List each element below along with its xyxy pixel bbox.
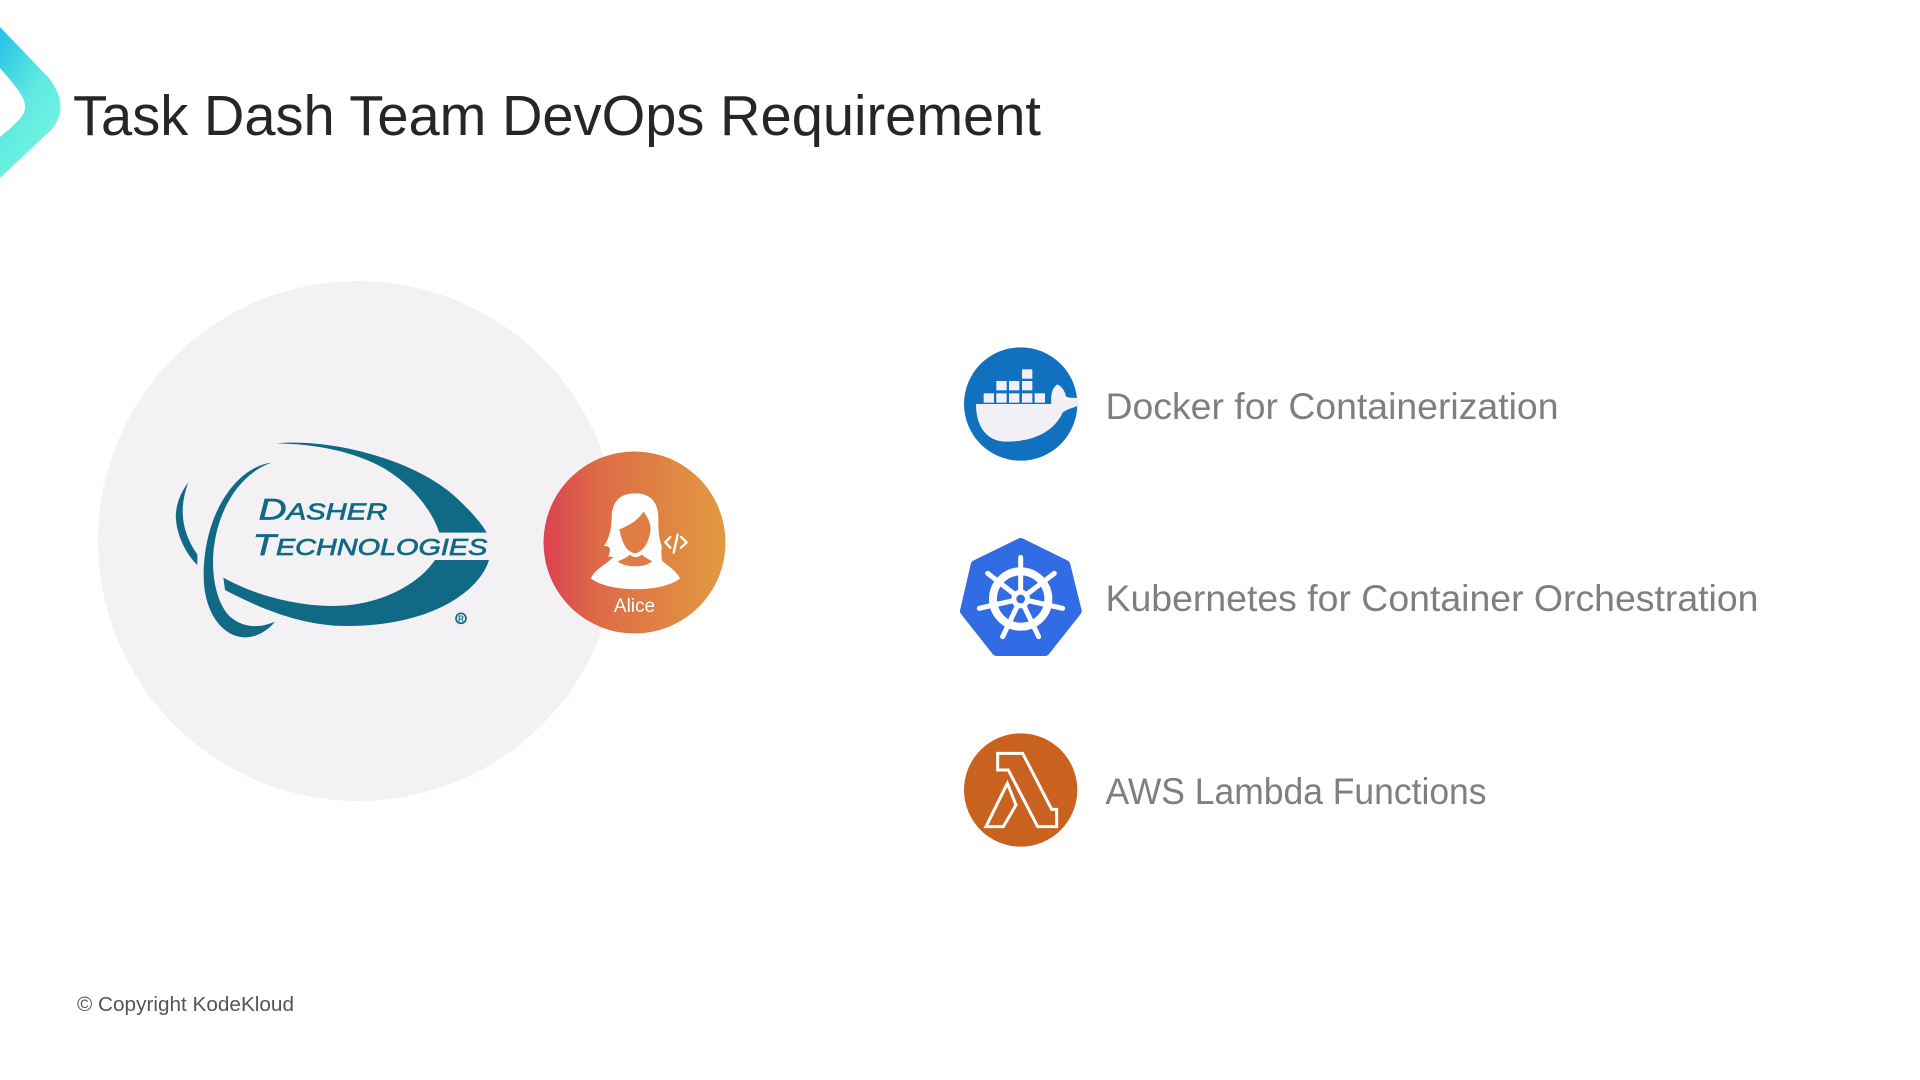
label: AWS Lambda: AWS Lambda Functions bbox=[1106, 771, 1486, 812]
label: Docker: Docker for Containerization bbox=[1106, 386, 1558, 427]
label: Kubernetes: Kubernetes for Container Orchestration bbox=[1106, 578, 1758, 619]
logo: Dasher Technologies bbox=[176, 443, 489, 637]
icon: AWS Lambda bbox=[964, 733, 1077, 847]
icon: Alice badge bbox=[544, 452, 726, 634]
logo: Dasher Technologies: DASHER bbox=[259, 493, 387, 526]
footer copyright: © Copyright KodeKloud bbox=[77, 994, 294, 1016]
panel: company circle bbox=[98, 281, 618, 801]
logo: Dasher Technologies: TECHNOLOGIES bbox=[253, 529, 487, 562]
icon: Docker bbox=[964, 347, 1079, 461]
icon: Kubernetes bbox=[965, 543, 1077, 651]
icon: Alice badge: Alice bbox=[614, 596, 655, 617]
title: Task Dash Team DevOps Requirement bbox=[73, 84, 1041, 148]
logo: Dasher Technologies: R bbox=[458, 614, 464, 623]
icon: header chevron bbox=[0, 27, 61, 178]
